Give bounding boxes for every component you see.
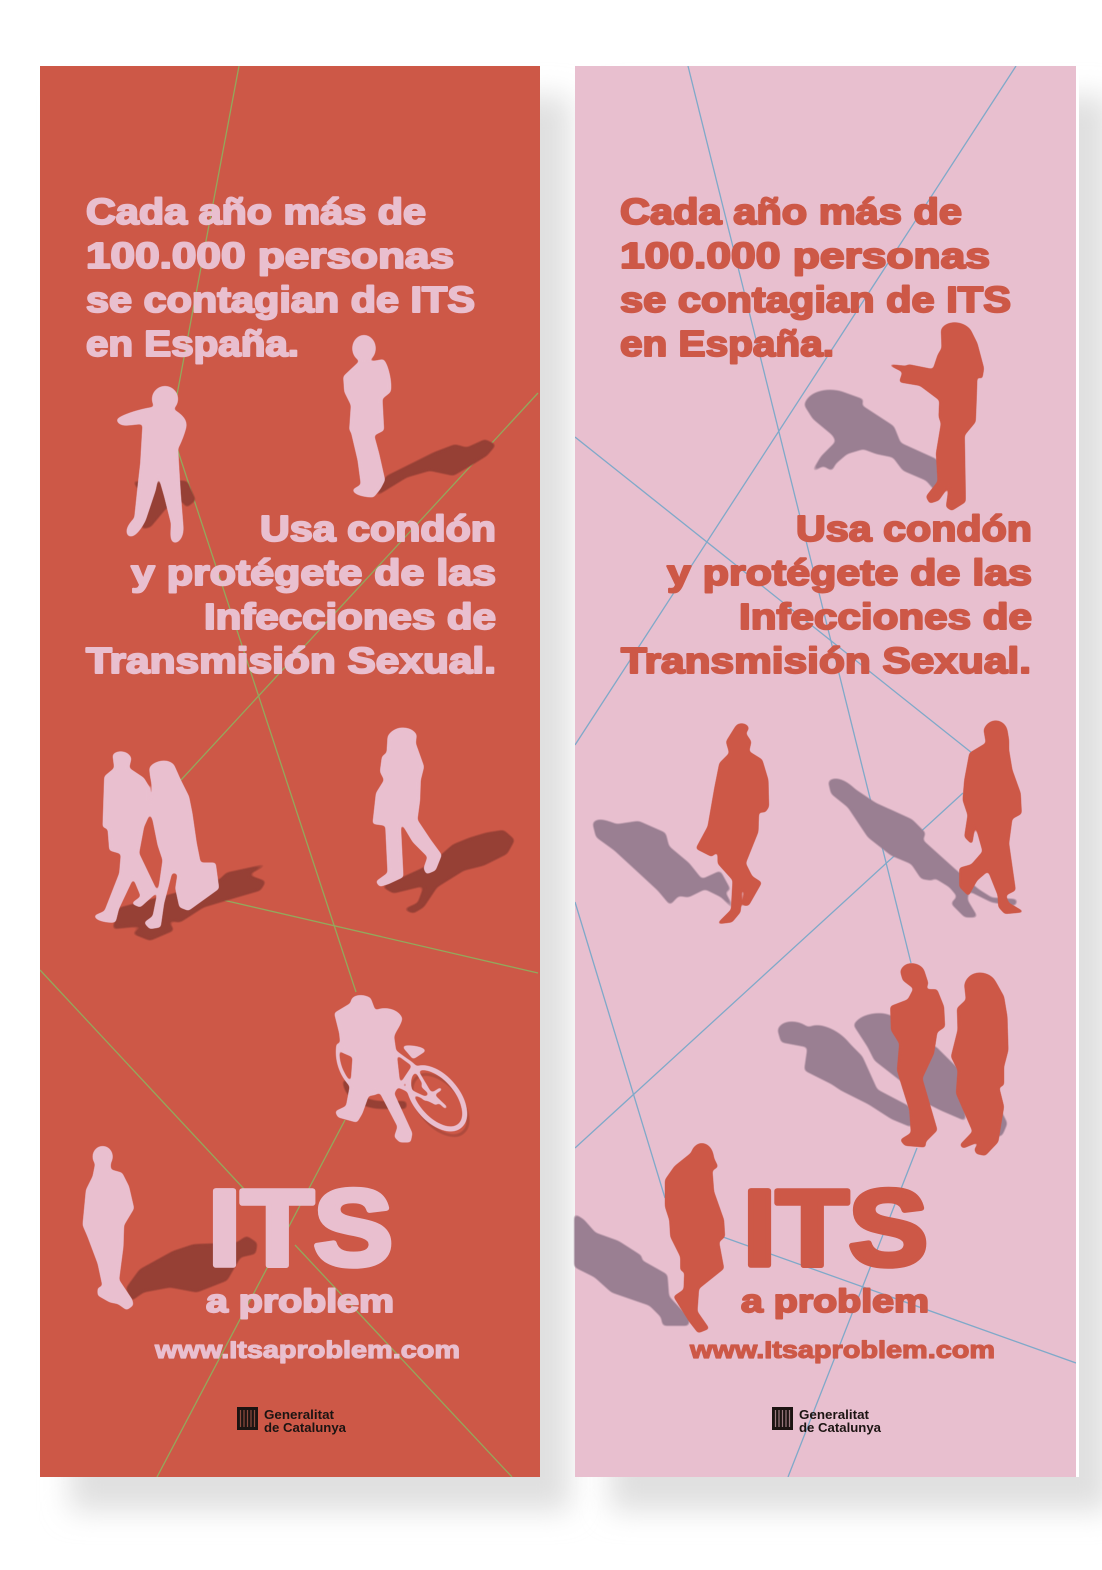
logo: Generalitat de Catalunya: de Catalunya: [264, 1421, 347, 1435]
heading: annual infections: se contagian de ITS: [86, 279, 475, 320]
text: use a condom: [86, 508, 496, 681]
figure: person standing, arms crossed: [344, 336, 495, 497]
heading: annual infections: [620, 191, 1011, 364]
heading: annual infections: se contagian de ITS: [620, 279, 1011, 320]
heading: annual infections: Cada año más de: [86, 191, 426, 232]
figure: person with bicycle: [335, 996, 479, 1146]
heading: annual infections: [86, 191, 475, 364]
text: use a condom: Usa condón: [796, 508, 1032, 549]
panel: red bookmark: [40, 66, 540, 1477]
network lines: green: [40, 66, 538, 1477]
logo: Generalitat de Catalunya: [772, 1407, 882, 1435]
logo: Generalitat de Catalunya: [237, 1407, 347, 1435]
heading: annual infections: 100.000 personas: [620, 235, 990, 276]
logotype: a problem: a problem: [206, 1283, 394, 1319]
website url: www.Itsaproblem.com: [154, 1337, 460, 1364]
network lines: blue: [575, 66, 1076, 1477]
logotype: ITS: ITS: [208, 1167, 393, 1288]
logotype: ITS: ITS: [743, 1167, 928, 1288]
text: use a condom: y protégete de las: [131, 552, 496, 593]
logotype: a problem: a problem: [741, 1283, 929, 1319]
text: use a condom: [621, 508, 1032, 681]
text: use a condom: Transmisión Sexual.: [621, 640, 1031, 681]
text: use a condom: Transmisión Sexual.: [86, 640, 496, 681]
text: use a condom: Infecciones de: [204, 596, 496, 637]
text: use a condom: y protégete de las: [667, 552, 1032, 593]
logo: Generalitat de Catalunya: Generalitat: [799, 1408, 870, 1422]
drop shadow: left bookmark: [70, 96, 570, 1511]
figure: woman walking: [373, 728, 514, 913]
logo: Generalitat de Catalunya: de Catalunya: [799, 1421, 882, 1435]
heading: annual infections: 100.000 personas: [86, 235, 454, 276]
figure: man pointing: [117, 387, 195, 542]
heading: annual infections: en España.: [86, 323, 299, 364]
panel: pink bookmark: [575, 66, 1079, 1477]
heading: annual infections: Cada año más de: [620, 191, 962, 232]
figure: couple walking with bag: [95, 752, 265, 940]
website url: www.Itsaproblem.com: [689, 1337, 995, 1364]
heading: annual infections: en España.: [620, 323, 834, 364]
figure: man walking: [829, 721, 1023, 917]
text: use a condom: Usa condón: [260, 508, 496, 549]
figure: two people talking: [778, 964, 1008, 1155]
text: use a condom: Infecciones de: [739, 596, 1032, 637]
figure: woman with cap, lower left: [575, 1144, 724, 1332]
logo: Generalitat de Catalunya: Generalitat: [264, 1408, 335, 1422]
figure: woman with bun walking: [593, 724, 768, 923]
figure: man standing, lower left: [83, 1147, 257, 1309]
drop shadow: right bookmark: [610, 96, 1102, 1511]
figure: woman reading: [805, 323, 983, 510]
